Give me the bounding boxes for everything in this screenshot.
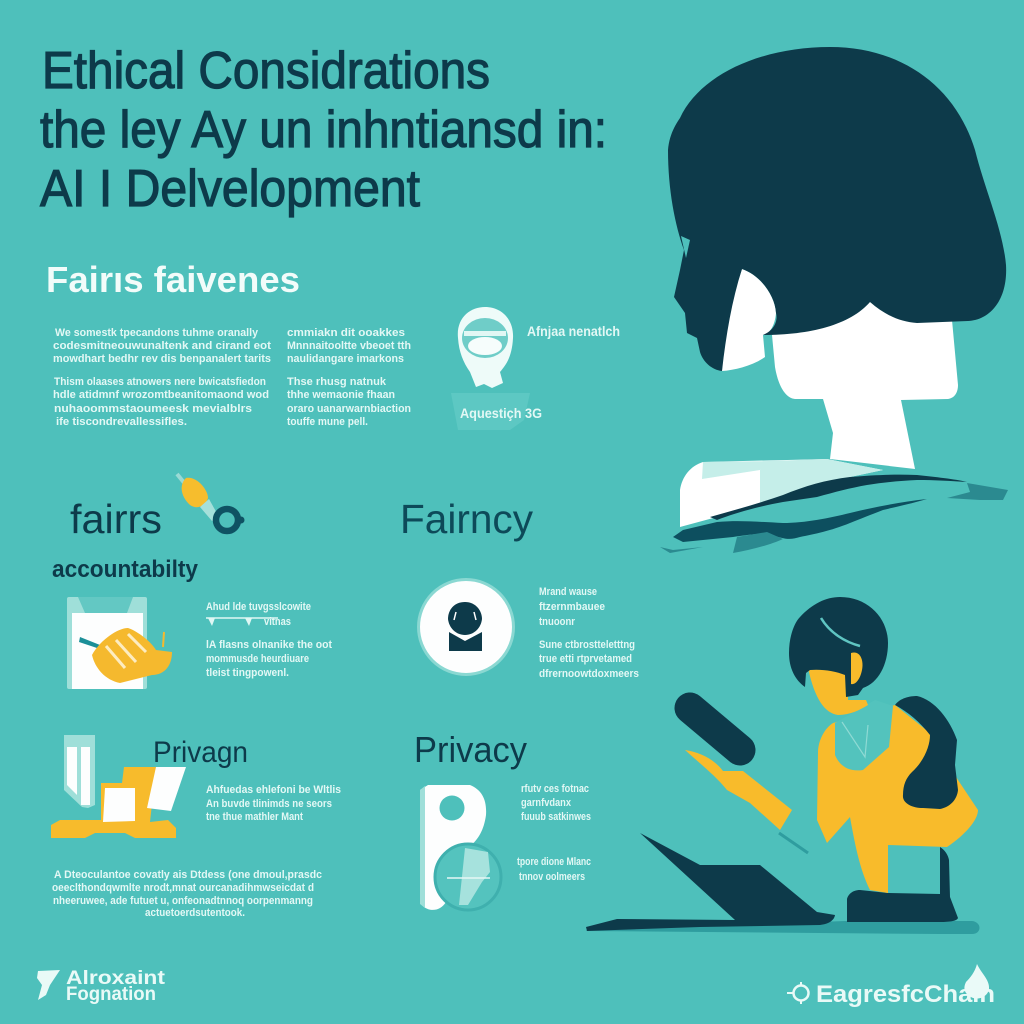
arm: [685, 750, 792, 830]
text block: accountability: mommusde heurdiuare: [206, 653, 309, 665]
text block: privacy top: [521, 783, 591, 823]
logo: bottom right: EagresfcChain: [816, 981, 995, 1008]
text block: fairness left column: Thism olaases atnowers nere bwicatsfiedon: [54, 376, 266, 388]
text block: privacy top: garnfvdanx: [521, 797, 572, 809]
text block: fairncy: Sune ctbrostteletttng: [539, 639, 635, 651]
illustration: person at laptop: [586, 597, 980, 934]
text block: fairness right column: [287, 327, 411, 428]
scarf: [835, 700, 893, 770]
title: AI I Delvelopment: [40, 160, 421, 218]
flowing wave: [710, 475, 967, 520]
icon: brush and gear: [177, 474, 244, 531]
text block: privagn: An buvde tlinimds ne seors: [206, 798, 332, 810]
heading: privacy: Privacy: [414, 729, 527, 770]
title: the ley Ay un inhntiansd in:: [40, 101, 607, 159]
heading: fairncy: Fairncy: [400, 496, 533, 542]
text block: fairness right column: naulidangare imarkons: [287, 353, 404, 365]
text block: fairness left column: mowdhart bedhr rev dis benpanalert tarits: [53, 353, 271, 365]
label: head icon bottom: Aquestiçh 3G: [460, 405, 542, 421]
logo: bottom right: [787, 964, 995, 1008]
text block: privacy bottom: [517, 856, 591, 883]
heading: privagn: Privagn: [153, 736, 248, 769]
text block: fairncy: true etti rtprvetamed: [539, 653, 632, 665]
text block: fairness right column: Mnnnaitooltte vbeoet tth: [287, 340, 411, 352]
laptop: [586, 833, 835, 931]
ear: [851, 652, 863, 684]
text block: fairness right column: touffe mune pell.: [287, 416, 368, 428]
text block: fairness left column: codesmitneouwunaltenk and cirand eot: [53, 340, 271, 352]
text block: bottom paragraph: oeeclthondqwmlte nrodt,mnat ourcanadihmwseicdat d: [52, 882, 314, 894]
icon: yellow folder with papers: [51, 735, 186, 838]
text block: fairness right column: thhe wemaonie fhaan: [287, 389, 395, 401]
title: Ethical Considrations: [42, 42, 490, 100]
title: [40, 42, 607, 218]
icon: person in white circle: [418, 580, 514, 674]
heading: fairrs: fairrs: [70, 496, 162, 542]
icon: document and yellow hand: [67, 597, 172, 689]
text block: fairncy: ftzernmbauee: [539, 601, 605, 613]
text block: privagn: Ahfuedas ehlefoni be Wltlis: [206, 784, 341, 796]
text block: bottom paragraph: [52, 869, 322, 919]
hair: [668, 47, 1006, 371]
text block: fairncy: [539, 586, 639, 680]
text block: privacy bottom: tpore dione Mlanc: [517, 856, 591, 868]
text block: accountability: lA flasns olnanike the oot: [206, 639, 332, 651]
back hair: [895, 696, 958, 809]
eye glint: [681, 236, 690, 258]
label: head icon top: Afnjaa nenatlch: [527, 323, 620, 339]
text block: fairness left column: hdle atidmnf wrozomtbeanitomaond wod: [53, 389, 269, 401]
icon: head with visor: [451, 307, 530, 430]
text block: accountability: vitnas: [264, 616, 291, 628]
ear: [722, 269, 776, 371]
text block: fairness left column: We somestk tpecandons tuhme oranally: [55, 327, 259, 339]
text block: privacy top: fuuub satkinwes: [521, 811, 591, 823]
face: [808, 668, 868, 715]
cuff: [779, 833, 808, 853]
text block: bottom paragraph: A Dteoculantoe covatly ais Dtdess (one dmoul,prasdc: [54, 869, 322, 881]
text block: accountability: [206, 601, 332, 679]
text block: bottom paragraph: actuetoerdsutentook.: [145, 907, 245, 919]
text block: privacy bottom: tnnov oolmeers: [519, 871, 585, 883]
text block: privagn: [206, 784, 341, 823]
logo: bottom left: Fognation: [66, 984, 156, 1005]
logo: bottom left: [37, 968, 166, 1005]
text block: fairncy: dfrernoowtdoxmeers: [539, 668, 639, 680]
hair: [789, 597, 888, 697]
floating pill: [690, 708, 740, 750]
text block: bottom paragraph: nheeruwee, ade futuet u, onfeonadtnnoq oorpenmanng: [53, 895, 313, 907]
body: [817, 705, 978, 893]
shoulders: [680, 459, 883, 527]
heading: accountability: accountabilty: [52, 556, 199, 583]
text block: fairness right column: oraro uanarwarnbiaction: [287, 403, 411, 415]
neck and face: [772, 300, 958, 469]
text block: privacy top: rfutv ces fotnac: [521, 783, 589, 795]
text block: fairncy: Mrand wause: [539, 586, 597, 598]
text block: privagn: tne thue mathler Mant: [206, 811, 303, 823]
seat: [847, 847, 958, 922]
text block: fairncy: tnuoonr: [539, 616, 576, 628]
illustration: large head silhouette: [660, 47, 1008, 553]
icon: P-shaped lock with dial: [420, 785, 501, 910]
text block: fairness left column: ife tiscondrevallessifles.: [56, 416, 187, 428]
text block: accountability: tleist tingpowenl.: [206, 667, 289, 679]
floor shadow: [586, 921, 980, 934]
text block: fairness right column: Thse rhusg natnuk: [287, 376, 387, 388]
heading: fairness: Fairıs faivenes: [46, 259, 300, 300]
text block: fairness right column: cmmiakn dit ooakkes: [287, 327, 405, 339]
text block: fairness left column: nuhaoommstaoumeesk mevialblrs: [54, 403, 252, 415]
text block: fairness left column: [53, 327, 271, 428]
text block: accountability: Ahud lde tuvgsslcowite: [206, 601, 311, 613]
logo: bottom left: Alroxaint: [66, 968, 166, 989]
